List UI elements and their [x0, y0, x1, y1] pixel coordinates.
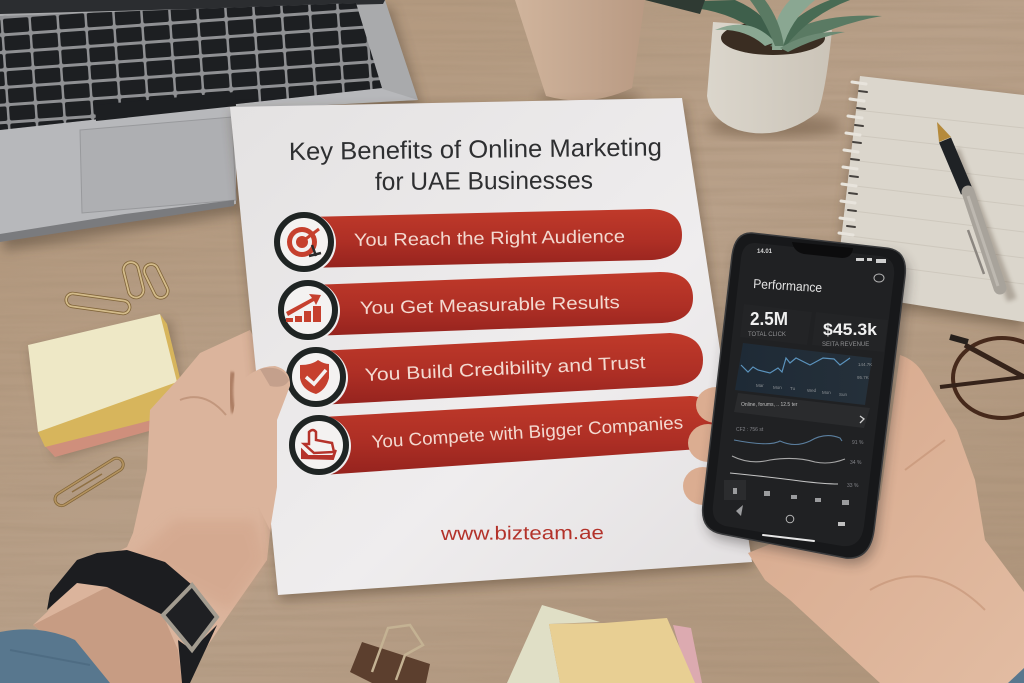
icon: rising bar chart: [280, 281, 340, 341]
paperclips top: [65, 261, 170, 314]
trend lines: CF2 : 756 st: [736, 427, 764, 433]
heading: Key Benefits of Online Marketing: [289, 133, 662, 166]
pen: [937, 122, 1012, 300]
phone screen: [713, 243, 894, 546]
performance heading: Performance: [753, 276, 823, 295]
glasses: [940, 337, 1024, 418]
leaves: [645, 0, 882, 52]
line chart panel: Mar: [756, 383, 764, 388]
benefit 4: compete with bigger companies: [291, 396, 714, 476]
notch: [792, 242, 853, 258]
list row: Online, forums, .. 12.5 ter: [741, 402, 798, 408]
benefit 2: measurable results: [280, 272, 693, 341]
line chart panel: Wed: [807, 388, 817, 393]
bottom sticky notes: [507, 605, 702, 683]
benefit 3: credibility and trust: [288, 333, 703, 408]
potted plant: [645, 0, 882, 137]
line chart panel: Tu: [790, 386, 796, 391]
binder clip: [350, 625, 430, 683]
paper: infographic sheet: [230, 98, 754, 600]
stat: total clicks: 2.5M: [750, 309, 788, 329]
icon: target: [276, 213, 336, 273]
icon: shield with check: [288, 348, 348, 408]
stat: revenue: SEITA REVENUE: [822, 342, 869, 348]
trend lines: 34 %: [850, 460, 862, 466]
stat: revenue: [812, 312, 888, 352]
left thumb over paper: [225, 366, 290, 530]
spiral binding: [839, 82, 867, 235]
benefit 3: credibility and trust: You Build Credibility and Trust: [364, 352, 646, 385]
heading: [289, 133, 662, 196]
sticky note stack: [28, 314, 185, 458]
laptop: [0, 0, 421, 251]
icon: pointing hand: [291, 416, 351, 476]
wristwatch: [47, 550, 217, 683]
coffee cup: [515, 0, 645, 106]
keyboard: [0, 3, 382, 130]
website url: www.bizteam.ae: [440, 523, 604, 545]
line chart panel: Mon: [773, 385, 782, 390]
trackpad: [80, 117, 236, 213]
paperclip bottom left: [53, 456, 126, 508]
benefit 1: reach the right audience: You Reach the Right Audience: [354, 226, 625, 250]
denim sleeve: [0, 629, 110, 683]
bottom nav icons: [724, 480, 849, 526]
stat: total clicks: TOTAL CLICK: [748, 332, 786, 338]
line chart panel: Mon: [822, 390, 831, 395]
status bar: 14.01: [757, 249, 773, 255]
left forearm and hand: [33, 330, 285, 683]
smartphone: [703, 233, 908, 564]
stat: total clicks: [740, 304, 812, 345]
right hand palm: [748, 355, 1024, 683]
stat: revenue: $45.3k: [823, 320, 878, 339]
line chart panel: 144.7K: [858, 362, 872, 367]
benefit 1: reach the right audience: [276, 209, 682, 273]
benefit 4: compete with bigger companies: You Compete with Bigger Companies: [371, 412, 684, 452]
spiral notebook: [835, 76, 1024, 328]
trend lines: 33 %: [847, 483, 859, 489]
benefit 2: measurable results: You Get Measurable Results: [360, 292, 620, 318]
heading: for UAE Businesses: [375, 166, 593, 196]
line chart panel: [735, 343, 872, 405]
line chart panel: Sun: [839, 392, 848, 397]
line chart panel: 95.7K: [857, 375, 869, 380]
trend lines: [730, 427, 864, 489]
right hand fingers behind phone: [683, 387, 736, 505]
list row: [734, 393, 870, 428]
home bar: [763, 535, 814, 541]
trend lines: 91 %: [852, 440, 864, 446]
